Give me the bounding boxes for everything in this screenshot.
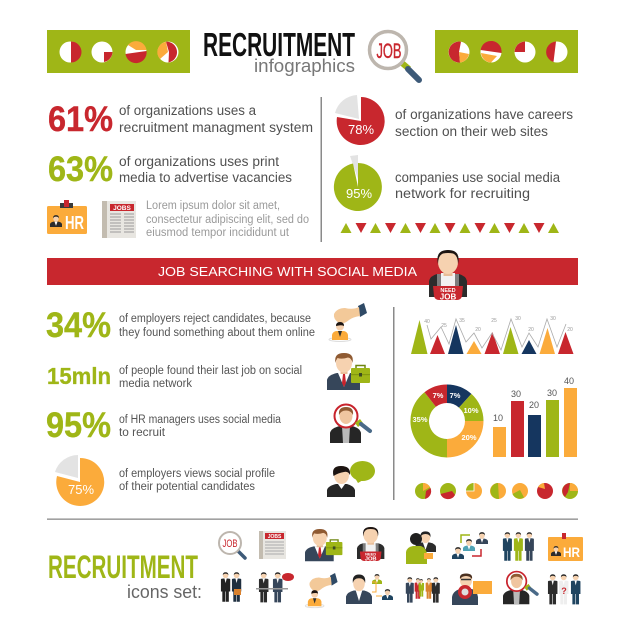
top right banner with pies — [435, 30, 578, 73]
stat: 95% pie: network for recruiting — [395, 186, 530, 201]
stat: 95% pie: 95% — [346, 186, 372, 201]
icon: candidates question: ? — [561, 586, 567, 596]
stat: 15mln — [47, 363, 302, 390]
stat: 95% pie — [334, 155, 560, 211]
small pies row — [415, 483, 578, 499]
bar chart: 20 — [529, 400, 539, 410]
stat: 63%: media to advertise vacancies — [119, 170, 292, 185]
icon: HR badge — [47, 200, 87, 234]
stat: 95% — [46, 406, 282, 445]
footer title: icons set: — [127, 582, 202, 602]
icon: HR badge small — [548, 533, 583, 561]
icon: need job small — [357, 527, 384, 563]
stat: 63% — [48, 150, 292, 189]
donut chart: 7% — [433, 391, 444, 400]
icon: job magnifier small: JOB — [222, 538, 238, 550]
icon: jobs newspaper — [102, 201, 136, 238]
icon: handshake — [221, 572, 241, 602]
icon: HR badge small: HR — [563, 544, 580, 560]
stat: 15mln: of people found their last job on social — [119, 365, 302, 377]
stat: 95%: 95% — [46, 406, 111, 445]
stat: 15mln: 15mln — [47, 363, 111, 389]
icon: three staff — [503, 532, 534, 561]
icon: org person — [346, 574, 393, 604]
bar chart: 30 — [547, 388, 557, 398]
icon: need job person — [429, 250, 467, 302]
donut chart: 20% — [461, 433, 477, 442]
stat: 63%: of organizations uses print — [119, 154, 279, 169]
icon: two at table — [256, 572, 294, 602]
stat: 78% pie: 78% — [348, 122, 374, 137]
triangle chart: 25 — [441, 323, 447, 329]
triangle chart — [411, 316, 574, 354]
stat: 34% — [46, 306, 315, 345]
lorem text block: consectetur adipiscing elit, sed do — [146, 214, 309, 226]
icon: jobs newspaper: JOBS — [113, 205, 132, 212]
banner: job searching with social media — [47, 258, 578, 285]
stat: 78% pie: section on their web sites — [395, 124, 548, 139]
triangle chart: 25 — [491, 318, 497, 324]
icon: network of people — [452, 532, 488, 559]
stat: 63%: 63% — [48, 150, 113, 189]
donut chart: 10% — [463, 406, 479, 415]
triangle chart: 20 — [528, 327, 534, 333]
stat: 61%: of organizations uses a — [119, 103, 256, 118]
lorem text block: Lorem ipsum dolor sit amet, — [146, 200, 280, 212]
triangle chart: 30 — [515, 316, 521, 322]
footer title — [48, 549, 202, 602]
icon: newspaper small — [259, 531, 286, 559]
stat: 61% — [48, 100, 313, 139]
banner: job searching with social media: JOB SEARCHING WITH SOCIAL MEDIA — [158, 264, 417, 279]
stat: 75% pie — [55, 455, 275, 506]
stat: 75% pie: 75% — [68, 482, 94, 497]
lorem text block — [146, 200, 309, 239]
icon: candidates question — [548, 574, 580, 604]
stat: 61%: 61% — [48, 100, 113, 139]
title — [203, 26, 355, 76]
title: infographics — [254, 56, 355, 76]
icon: newspaper small: JOBS — [268, 534, 282, 540]
stat: 95%: of HR managers uses social media — [119, 414, 282, 426]
triangle chart: 40 — [424, 319, 430, 325]
icon: magnified candidate small — [503, 572, 537, 604]
icon: hand small — [305, 573, 338, 608]
stat: 75% pie: of employers views social profile — [119, 468, 275, 480]
top left banner with pies — [47, 30, 190, 73]
icon: man with briefcase — [327, 353, 370, 390]
stat: 95%: to recruit — [119, 427, 166, 439]
lorem text block: eiusmod tempor incididunt ut — [146, 227, 290, 239]
stat: 61%: recruitment managment system — [119, 120, 313, 135]
icon: megaphone man — [452, 574, 492, 605]
stat: 78% pie: of organizations have careers — [395, 107, 573, 122]
donut chart: 35% — [412, 415, 428, 424]
triangle chart: 20 — [567, 327, 573, 333]
bar chart: 10 — [493, 413, 503, 423]
icon: hand picking candidate — [329, 303, 367, 342]
icon: job magnifier small — [219, 532, 245, 558]
icon set — [219, 527, 583, 608]
stat: 34%: 34% — [46, 306, 111, 345]
donut chart — [410, 384, 484, 458]
donut chart: 7% — [450, 391, 461, 400]
stat: 34%: they found something about them online — [119, 327, 315, 339]
triangle chart: 35 — [459, 318, 465, 324]
triangle chart: 30 — [550, 316, 556, 322]
stat: 78% pie — [335, 95, 573, 145]
icon: magnified candidate — [330, 404, 370, 443]
bar chart — [493, 376, 577, 457]
icon: meeting — [406, 577, 440, 603]
icon: job magnifier — [370, 32, 419, 80]
icon: job magnifier: JOB — [376, 40, 402, 63]
bar chart: 40 — [564, 376, 574, 386]
triangle chart: 20 — [475, 327, 481, 333]
icon: interview — [406, 531, 436, 564]
stat: 34%: of employers reject candidates, because — [119, 313, 311, 325]
icon: man with briefcase small — [305, 529, 342, 561]
footer title: RECRUITMENT — [48, 549, 198, 585]
icon: man with speech bubble — [327, 461, 375, 497]
stat: 95% pie: companies use social media — [395, 170, 560, 185]
bar chart: 30 — [511, 389, 521, 399]
triangle row — [340, 223, 559, 233]
title: RECRUITMENT — [203, 26, 355, 63]
icon: HR badge: HR — [65, 213, 84, 233]
stat: 75% pie: of their potential candidates — [119, 481, 255, 493]
stat: 15mln: media network — [119, 378, 192, 390]
